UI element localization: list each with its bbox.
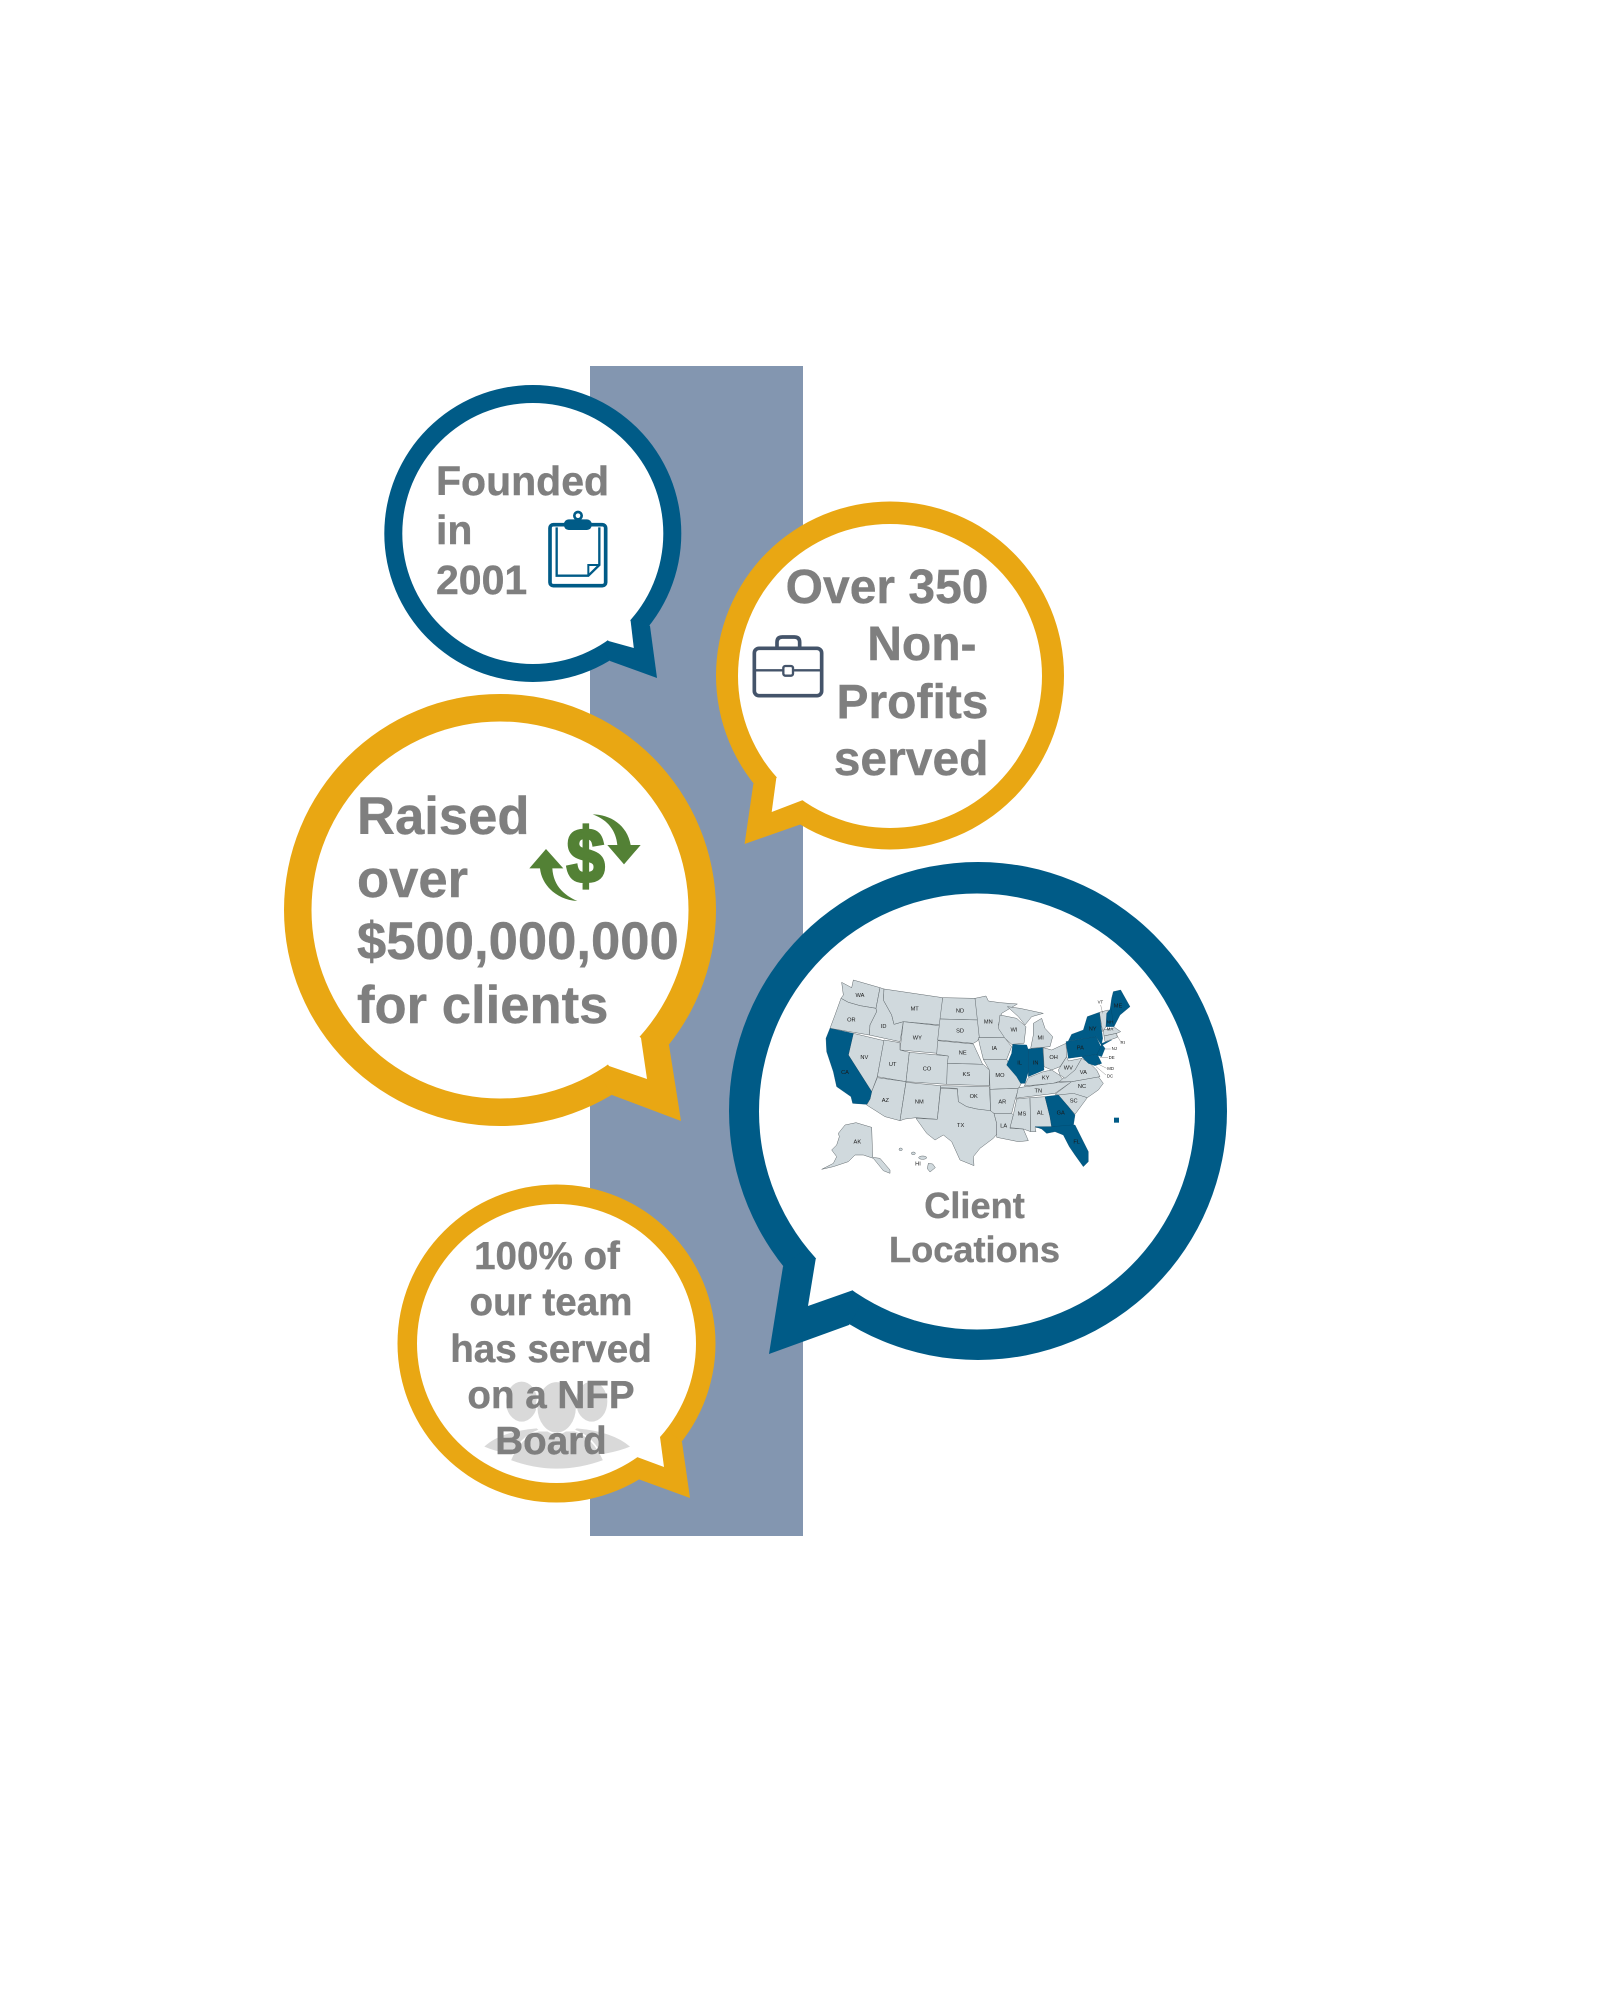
state labels: RI [1120,1040,1125,1045]
state labels: UT [889,1062,897,1068]
text: 100% of our team has served on a NFP board: our team [470,1281,632,1324]
panel: client locations [729,862,1227,1360]
state labels: OR [847,1017,856,1023]
state labels: NC [1078,1084,1086,1090]
state labels: AK [854,1139,861,1145]
state labels: KS [963,1072,970,1078]
text: over 350 non-profits served: Non- [867,618,976,671]
state labels: DC [1107,1073,1113,1078]
state labels: TX [957,1123,965,1129]
state labels: AR [998,1099,1006,1105]
state labels: KY [1042,1076,1050,1082]
state labels: MN [984,1019,993,1025]
icon: dollar with circular arrows [529,813,641,901]
text: raised over $500,000,000 for clients: $500,000,000 [357,912,679,971]
text: over 350 non-profits served: Profits [836,676,988,729]
text: raised over $500,000,000 for clients [357,787,679,1035]
icon: dollar with circular arrows: $ [567,813,605,899]
state labels: MO [995,1073,1005,1079]
bubble: non-profits [716,502,1064,850]
bubble: client locations [729,862,1227,1360]
gray states [822,980,1121,1173]
text: raised over $500,000,000 for clients: Raised [357,787,529,846]
state labels: SC [1070,1098,1078,1104]
icon: people silhouette [484,1381,630,1469]
text: raised over $500,000,000 for clients: over [357,850,468,909]
state labels: HI [915,1161,921,1167]
state labels: MA [1107,1027,1113,1032]
state labels: WA [856,993,865,999]
map: US states [822,980,1130,1173]
state labels: IL [1017,1061,1022,1067]
highlighted states [826,990,1130,1167]
bubble: founded [384,385,681,682]
text: founded in 2001: 2001 [436,557,527,603]
state labels: FL [1073,1140,1080,1146]
state labels: IA [992,1046,997,1052]
text: over 350 non-profits served: Over 350 [786,561,988,614]
text: over 350 non-profits served [786,561,988,786]
state labels: OK [970,1094,978,1100]
state labels: SD [956,1028,964,1034]
state labels: WV [1064,1066,1073,1072]
state labels: NH [1107,1019,1113,1024]
state labels: AL [1037,1110,1044,1116]
state labels: VA [1080,1070,1087,1076]
text: 100% of our team has served on a NFP board [450,1235,652,1463]
state labels: GA [1057,1110,1065,1116]
text: 100% of our team has served on a NFP board: 100% of [474,1235,620,1278]
state labels: NV [860,1055,868,1061]
panel: founded in 2001 [384,385,681,682]
text: raised over $500,000,000 for clients: for clients [357,976,608,1035]
vertical background band [590,366,803,1536]
state labels: WY [913,1036,922,1042]
icon: briefcase [754,637,822,696]
state labels: ME [1114,1003,1122,1009]
state labels: MS [1018,1111,1026,1117]
icon: clipboard [550,512,606,586]
state labels: MD [1107,1066,1114,1071]
state labels: WI [1011,1027,1018,1033]
state labels: NM [915,1099,924,1105]
state labels: MI [1038,1036,1044,1042]
text: founded in 2001: Founded [436,458,609,504]
state labels [841,993,1125,1167]
text: 100% of our team has served on a NFP board: has served [450,1328,652,1371]
text: client locations: Locations [889,1229,1060,1270]
state labels: AZ [882,1098,889,1104]
state labels: MT [911,1007,919,1013]
bubble: raised [284,694,716,1126]
state labels: DE [1109,1055,1115,1060]
panel: raised over $500,000,000 [284,694,716,1126]
state labels: NY [1089,1026,1097,1032]
state labels: PA [1077,1046,1084,1052]
state labels: VT [1098,1000,1103,1005]
text: client locations: Client [924,1185,1025,1226]
text: founded in 2001: in [436,507,472,553]
state labels: NJ [1112,1046,1117,1051]
state labels: ID [881,1024,886,1030]
state labels: CA [841,1070,849,1076]
state labels: NE [959,1050,967,1056]
state labels: LA [1000,1124,1007,1130]
state labels: CO [923,1067,932,1073]
text: 100% of our team has served on a NFP board: on a NFP [467,1374,635,1417]
panel: over 350 non-profits served [716,502,1064,850]
text: 100% of our team has served on a NFP board: Board [495,1420,607,1463]
state labels: TN [1035,1089,1042,1095]
text: client locations [889,1185,1060,1270]
state labels: OH [1049,1055,1058,1061]
bubble: team [398,1184,716,1502]
state labels: ND [956,1008,964,1014]
panel: 100% of our team [398,1184,716,1502]
text: founded in 2001 [436,458,609,603]
state labels: IN [1033,1060,1038,1066]
text: over 350 non-profits served: served [834,733,988,786]
